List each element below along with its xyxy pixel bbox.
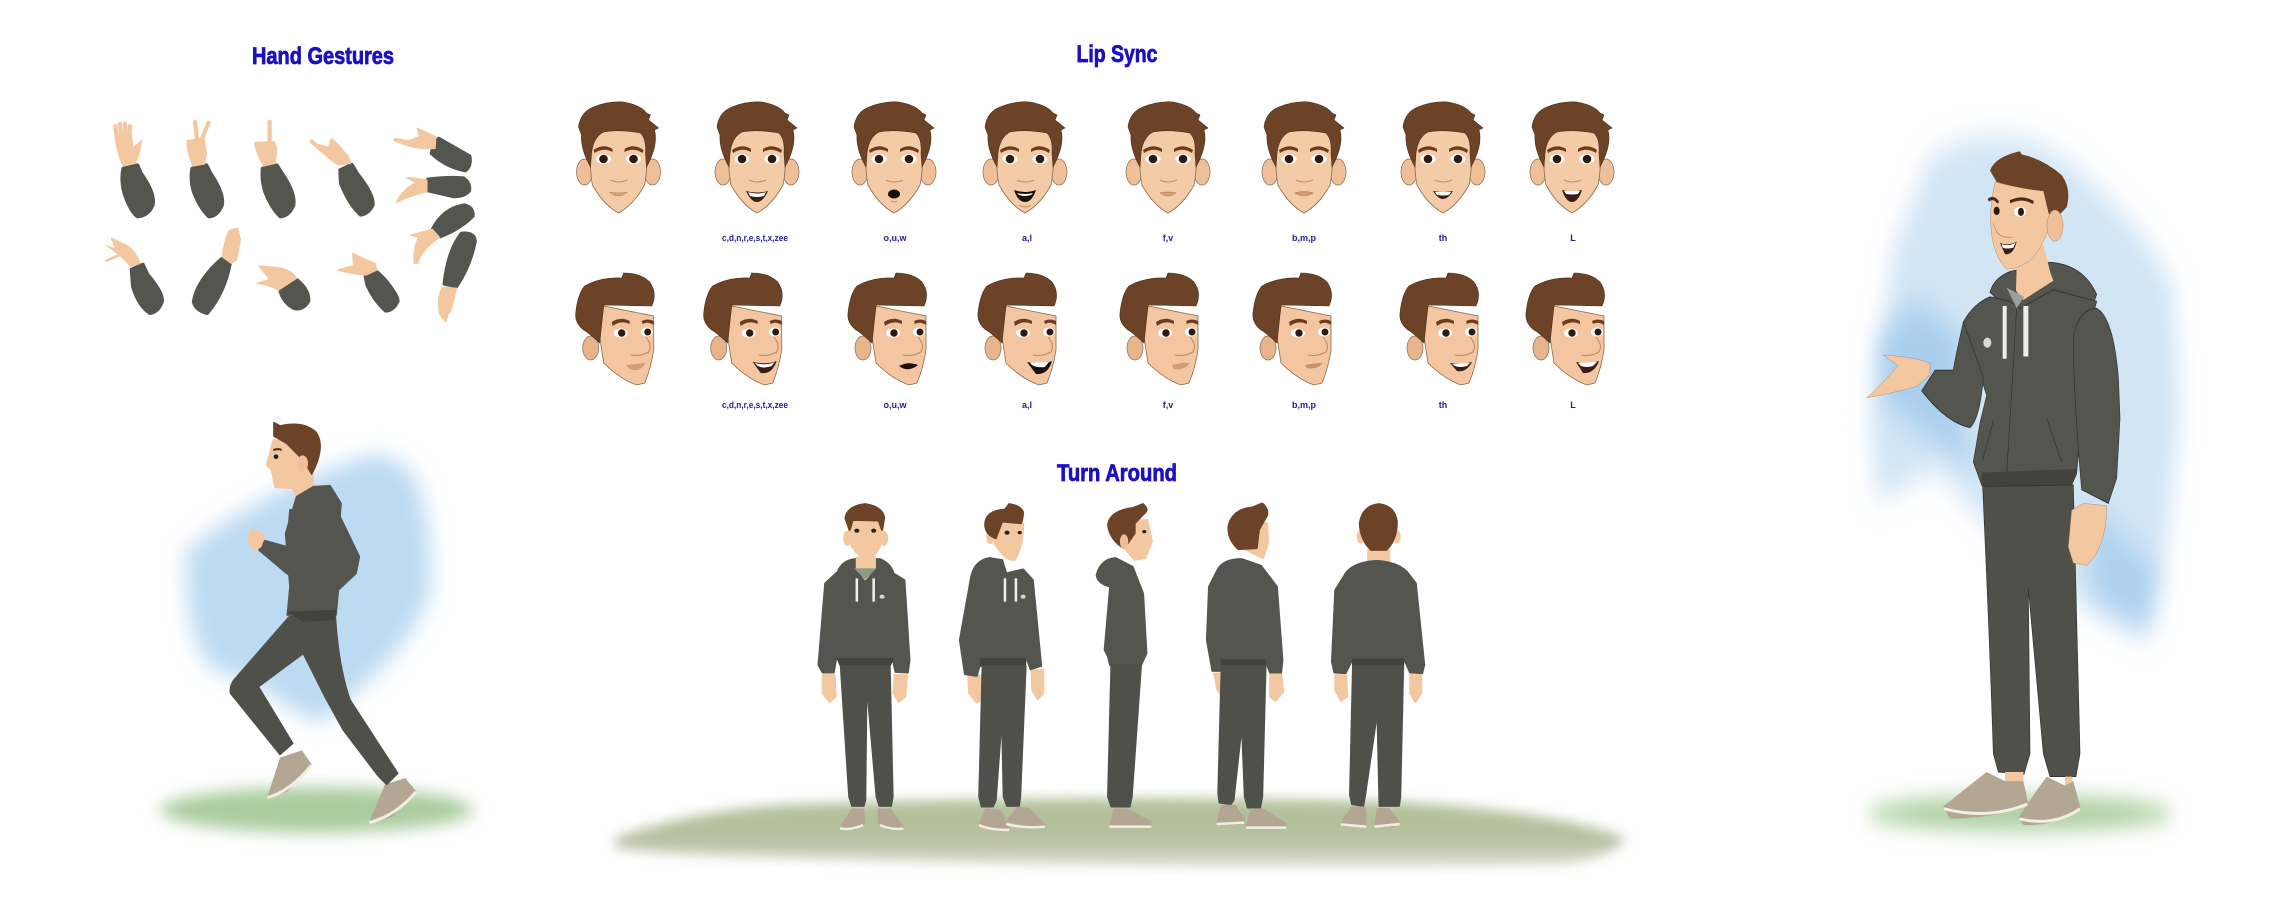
figure: back view — [1332, 504, 1424, 827]
panel: lip sync front labels: f,v — [1163, 233, 1173, 243]
watercolor: blue — [186, 455, 430, 721]
face: angled c,d,n,r,e,s,t,x,zee — [704, 273, 782, 385]
face: angled L — [1526, 273, 1605, 385]
figure: side view — [1097, 504, 1152, 827]
figure: three-quarter view — [960, 504, 1045, 830]
panel: presenting pose — [1867, 136, 2180, 831]
panel: lip sync angled labels: th — [1439, 400, 1447, 410]
ground: turn around — [615, 798, 1625, 866]
panel: lip sync front labels: c,d,n,r,e,s,t,x,zee — [722, 233, 788, 243]
panel: lip sync front labels: b,m,p — [1292, 233, 1317, 243]
face: front L — [1530, 102, 1614, 213]
panel: lip sync angled labels — [722, 400, 1576, 410]
panel: lip sync front labels: L — [1570, 233, 1576, 243]
heading: Hand Gestures: Hand Gestures — [252, 43, 394, 70]
face: front neutral — [576, 102, 660, 213]
watercolor: blue — [1870, 136, 2180, 639]
face: angled th — [1400, 273, 1479, 385]
panel: lip sync angled labels: f,v — [1163, 400, 1173, 410]
panel: running pose — [160, 423, 473, 833]
panel: lip sync front row — [576, 102, 1614, 213]
heading: Lip Sync: Lip Sync — [1076, 41, 1158, 68]
face: angled b,m,p — [1253, 273, 1332, 385]
panel: lip sync front labels — [722, 233, 1576, 243]
face: front th — [1401, 102, 1485, 213]
face: front b,m,p — [1262, 102, 1346, 213]
face: front c,d,n,r,e,s,t,x,zee — [715, 102, 799, 213]
panel: hand gestures — [106, 122, 475, 322]
ground: green — [1867, 796, 2173, 831]
face: angled f,v — [1120, 273, 1199, 385]
panel: lip sync angled labels: o,u,w — [884, 400, 907, 410]
panel: lip sync angled labels: c,d,n,r,e,s,t,x,zee — [722, 400, 788, 410]
panel: lip sync angled labels: b,m,p — [1292, 400, 1317, 410]
figure: front view — [819, 504, 909, 829]
face: front a,l — [983, 102, 1067, 213]
character: runner — [230, 423, 416, 823]
heading: Turn Around: Turn Around — [1057, 460, 1177, 487]
panel: lip sync angled labels: L — [1570, 400, 1576, 410]
face: angled a,l — [978, 273, 1057, 385]
panel: lip sync front labels: a,l — [1022, 233, 1032, 243]
panel: lip sync front labels: o,u,w — [884, 233, 907, 243]
face: front o,u,w — [852, 102, 936, 213]
figure: back three-quarter view — [1207, 503, 1286, 828]
panel: lip sync front labels: th — [1439, 233, 1447, 243]
ground: green — [160, 787, 473, 833]
face: angled neutral — [576, 273, 654, 385]
character: presenter — [1867, 151, 2120, 825]
panel: turn around figures — [819, 503, 1424, 830]
face: front f,v — [1126, 102, 1210, 213]
panel: lip sync three-quarter row — [576, 273, 1605, 385]
face: angled o,u,w — [848, 273, 927, 385]
panel: lip sync angled labels: a,l — [1022, 400, 1032, 410]
